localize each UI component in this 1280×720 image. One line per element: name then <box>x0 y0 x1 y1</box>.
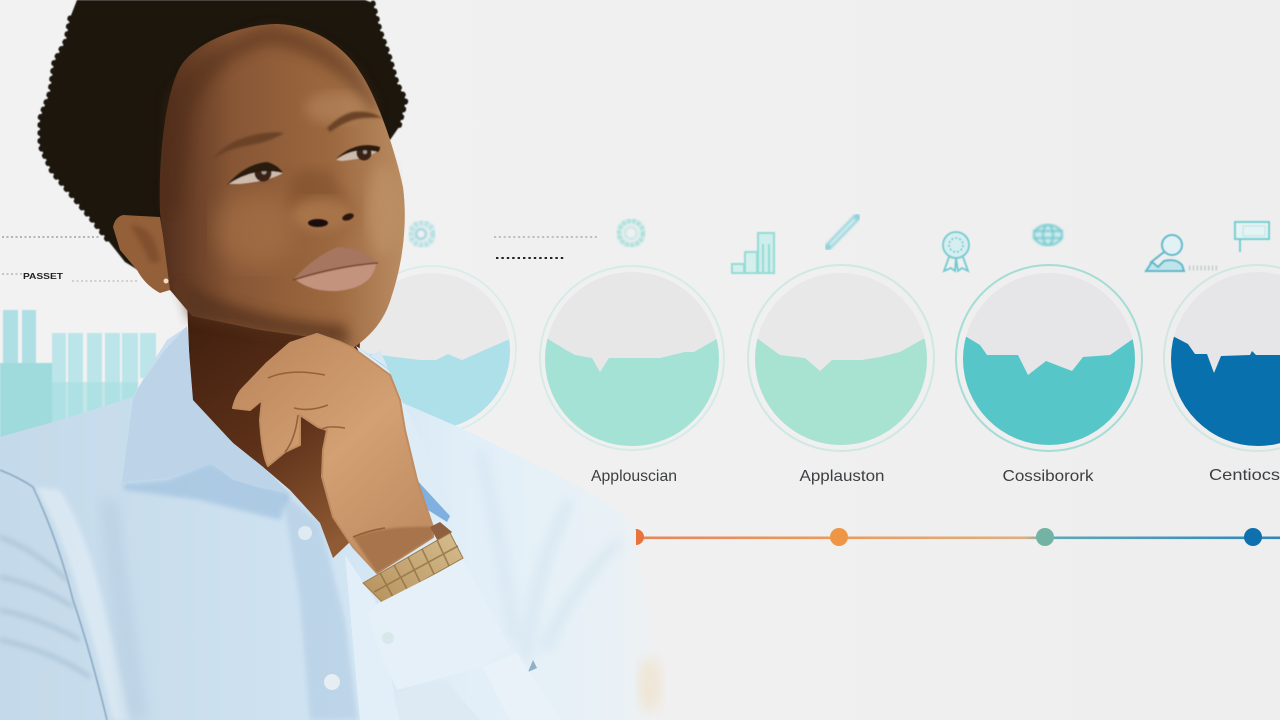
sleeve folds <box>0 537 90 677</box>
panel: circle gauge 1 <box>368 265 517 429</box>
gauge 4 fill <box>963 336 1135 445</box>
left eye <box>227 162 283 185</box>
wrist shadow <box>353 527 433 573</box>
timeline dot 1 <box>628 529 644 545</box>
cream smudge <box>638 657 662 713</box>
gauge 5 top <box>1171 272 1280 446</box>
button lower <box>324 674 340 690</box>
icon: round badge <box>619 221 643 245</box>
front fold shading <box>100 500 150 720</box>
face <box>160 24 405 348</box>
button <box>298 526 312 540</box>
hand and wrist <box>233 334 433 573</box>
panel: circle gauge 2 <box>540 266 725 485</box>
forehead highlight <box>305 92 365 124</box>
icon: flag sign <box>1235 222 1269 252</box>
right eye <box>335 145 380 161</box>
icon: gear <box>411 223 433 245</box>
right collar white <box>356 346 453 517</box>
shirt body <box>0 328 657 720</box>
label: Applouscian <box>591 468 677 485</box>
cuff tab <box>483 653 560 720</box>
timeline dot 3 <box>1036 528 1054 546</box>
woman figure <box>0 0 662 720</box>
label: Cossiborork <box>1002 468 1095 485</box>
gauge 3 fill <box>755 338 927 445</box>
icon: buildings chart <box>732 233 774 273</box>
bar chart: tall bars <box>3 310 36 365</box>
gauge 1 top <box>354 273 510 429</box>
icon: award ribbon <box>943 232 969 271</box>
gauge 3 top <box>755 273 927 445</box>
timeline <box>628 528 1280 546</box>
right shirt light area <box>345 555 400 720</box>
arm folds <box>480 450 620 660</box>
icon: pencil <box>828 217 857 247</box>
earring <box>164 278 168 284</box>
hair <box>40 0 406 290</box>
sleeve fold detail <box>528 660 537 672</box>
right collar blue <box>356 346 392 372</box>
left annotation lines <box>2 237 138 281</box>
gauge 2 top <box>545 272 719 446</box>
panel: circle gauge 4 <box>956 265 1142 485</box>
panel: circle gauge 5 <box>1164 265 1280 484</box>
icon: globe <box>1033 225 1063 245</box>
timeline dot 2 <box>830 528 848 546</box>
nose <box>290 170 356 234</box>
lower sleeve <box>393 680 480 720</box>
label: Applauston <box>800 468 884 485</box>
centre annotation lines <box>494 237 598 258</box>
placket <box>282 492 358 720</box>
small label: PASSET <box>23 271 64 281</box>
lips <box>293 247 378 291</box>
shirt sleeve seam <box>0 470 107 720</box>
shirt cuff <box>368 560 510 690</box>
right cheek highlight <box>367 165 399 255</box>
panel: circle gauge 3 <box>748 265 934 485</box>
neck and chest <box>170 290 360 558</box>
collar shadow <box>122 463 290 520</box>
grey dotted line <box>494 236 598 238</box>
dotted guide line lower right <box>72 280 138 282</box>
seam highlight <box>36 487 130 720</box>
jaw shadow <box>180 280 350 345</box>
watch <box>363 522 463 603</box>
ear <box>113 215 180 293</box>
collar inner blue <box>415 478 450 522</box>
icon: magnifier with person <box>1146 235 1219 271</box>
timeline dot 4 <box>1244 528 1262 546</box>
bar chart: short bars <box>52 333 156 423</box>
dotted guide line top <box>2 236 100 238</box>
left eyebrow <box>212 132 284 160</box>
collar left <box>122 326 290 494</box>
finger creases <box>268 372 385 537</box>
cheek highlight <box>215 192 295 268</box>
gauge 1 fill <box>368 339 510 426</box>
bar chart: base block <box>0 363 52 438</box>
bar chart: lower band <box>52 382 138 427</box>
panel: bar chart backdrop <box>0 310 156 438</box>
cuff button <box>382 632 394 644</box>
label: Centiocs <box>1209 467 1280 484</box>
dotted guide line lower <box>2 273 22 275</box>
right eyebrow <box>327 112 382 132</box>
black dotted line <box>496 257 564 259</box>
gauge 4 top <box>963 273 1135 445</box>
ear inner shadow <box>130 225 160 262</box>
hairline shadow <box>165 25 380 210</box>
gauge 2 fill <box>545 338 719 446</box>
timeline line <box>640 536 1280 539</box>
gauge 5 fill <box>1171 336 1280 446</box>
